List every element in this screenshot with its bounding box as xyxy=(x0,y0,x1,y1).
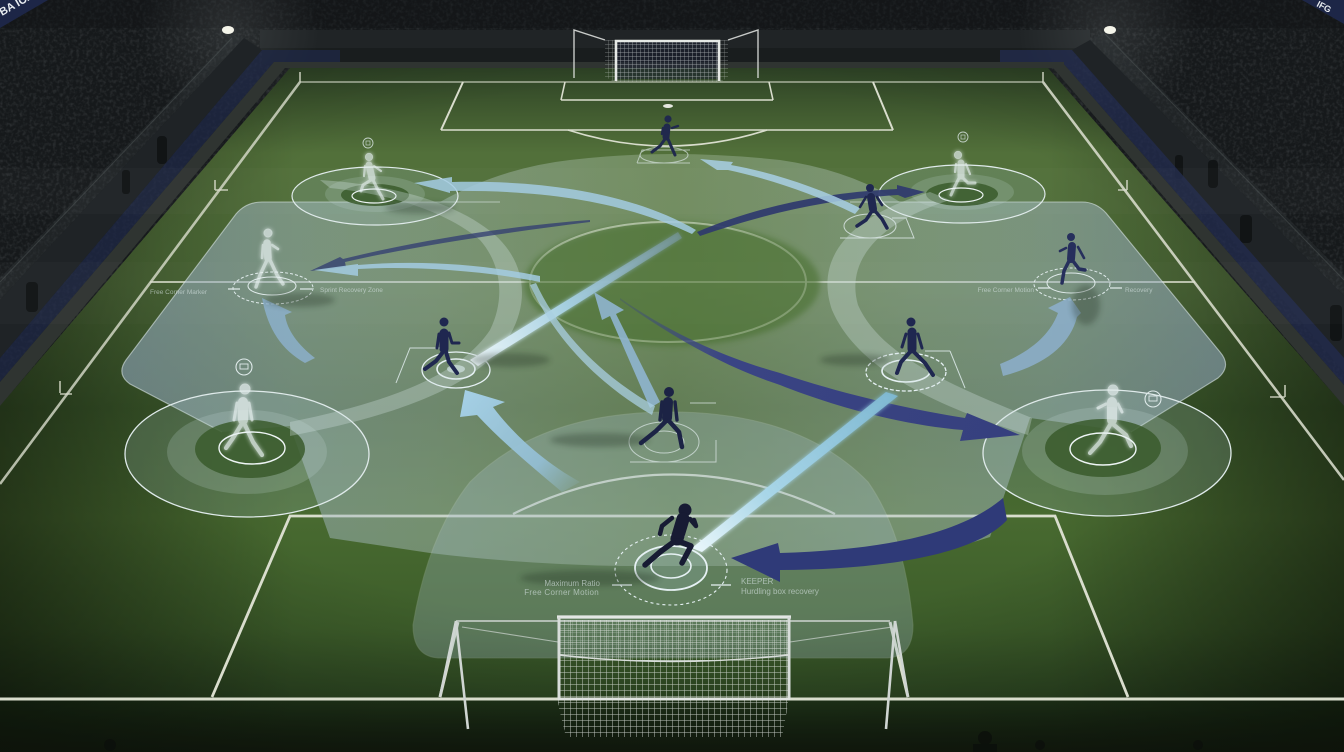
player: striker xyxy=(645,504,696,565)
label: striker left: Maximum Ratio xyxy=(544,579,601,588)
panel: shaded left and right movement zone xyxy=(122,154,1226,566)
ring: right midfielder xyxy=(866,351,965,391)
ghost player: bottom right xyxy=(1090,385,1131,453)
ground shadows xyxy=(265,202,1100,586)
player: upper right runner xyxy=(857,184,887,228)
label: striker right: KEEPER xyxy=(741,577,774,586)
label: striker right: Hurdling box recovery xyxy=(741,587,819,596)
icon: upper right badge xyxy=(958,132,968,142)
stewards along the touchline xyxy=(26,136,1342,341)
player status icons xyxy=(236,132,1161,407)
arrow: light run to upper left xyxy=(414,177,696,234)
label: striker left: Free Corner Motion xyxy=(524,588,599,597)
ring: top runner xyxy=(637,147,690,163)
arrow: light diagonal to centre xyxy=(470,232,682,366)
foreground silhouettes xyxy=(104,731,1203,752)
band: right curve xyxy=(827,192,1032,435)
panel: bottom penalty zone xyxy=(413,412,913,658)
band: left flank return xyxy=(262,298,315,363)
ring: bottom left target xyxy=(125,391,369,517)
player: right wing xyxy=(1060,233,1085,283)
band: right flank return xyxy=(1000,297,1081,376)
label: striker right xyxy=(741,577,819,596)
ring: midfield runner xyxy=(629,403,716,462)
player rings xyxy=(125,147,1231,605)
ghost player: left wing xyxy=(256,229,283,287)
player annotations xyxy=(150,287,1153,597)
arrow: dark return to striker xyxy=(731,498,1007,582)
corner banners xyxy=(0,0,1344,28)
ring: upper right runner xyxy=(840,214,914,238)
icon: upper left badge xyxy=(363,138,373,148)
icon: bottom left badge xyxy=(236,359,252,375)
advertising boards xyxy=(0,50,1344,406)
ghost player: upper right xyxy=(951,151,975,195)
label: striker left xyxy=(524,579,601,597)
ring: bottom right target xyxy=(983,390,1231,516)
band: left curve xyxy=(290,180,522,436)
arrow: light to centre xyxy=(594,292,660,408)
goal net xyxy=(557,617,791,737)
label: left wing left: Free Corner Marker xyxy=(150,289,208,296)
panel: central pitch window xyxy=(524,222,820,346)
arrow: light to left midfielder xyxy=(460,390,580,492)
label: right wing right: Recovery xyxy=(1125,287,1153,294)
player: left midfielder xyxy=(425,318,459,373)
players xyxy=(226,115,1131,586)
arrow: big dark sweep to bottom right xyxy=(620,298,1020,441)
player: top runner xyxy=(652,115,678,155)
ring: bottom striker xyxy=(612,535,731,605)
banner: top right xyxy=(1302,0,1344,24)
arrow: light beam from striker xyxy=(692,392,898,552)
player: right midfielder xyxy=(897,318,933,375)
movement arrows xyxy=(310,159,1020,582)
arrow: dark run to left wing xyxy=(310,220,590,271)
arrow: light run to top xyxy=(700,159,860,214)
near goal xyxy=(440,617,908,737)
ring: top left target xyxy=(292,167,458,225)
ghost player: bottom left xyxy=(226,384,262,455)
stand concourse walkways xyxy=(0,32,1344,372)
arrow: light run to left wing xyxy=(314,263,540,282)
banner: top left xyxy=(0,0,48,28)
arrow: light curve to centre circle xyxy=(530,283,655,415)
goal stanchions xyxy=(440,621,908,729)
ring: top right target xyxy=(879,165,1045,223)
stadium floodlights xyxy=(222,26,1116,34)
ghost player: upper left xyxy=(361,153,383,199)
icon: bottom right badge xyxy=(1145,391,1161,407)
far goal xyxy=(574,30,758,82)
ring: left midfielder xyxy=(396,348,490,388)
ring: left wing xyxy=(228,272,313,304)
label: left wing right: Sprint Recovery Zone xyxy=(320,287,383,294)
ring: right wing xyxy=(1034,268,1122,300)
arrow: dark run to upper right xyxy=(697,185,925,236)
tactical zones xyxy=(122,154,1226,658)
zone outline xyxy=(122,202,1226,432)
curved pale movement bands xyxy=(262,180,1081,436)
label: right wing left: Free Corner Motion xyxy=(978,287,1034,294)
player: midfield runner xyxy=(641,387,682,447)
